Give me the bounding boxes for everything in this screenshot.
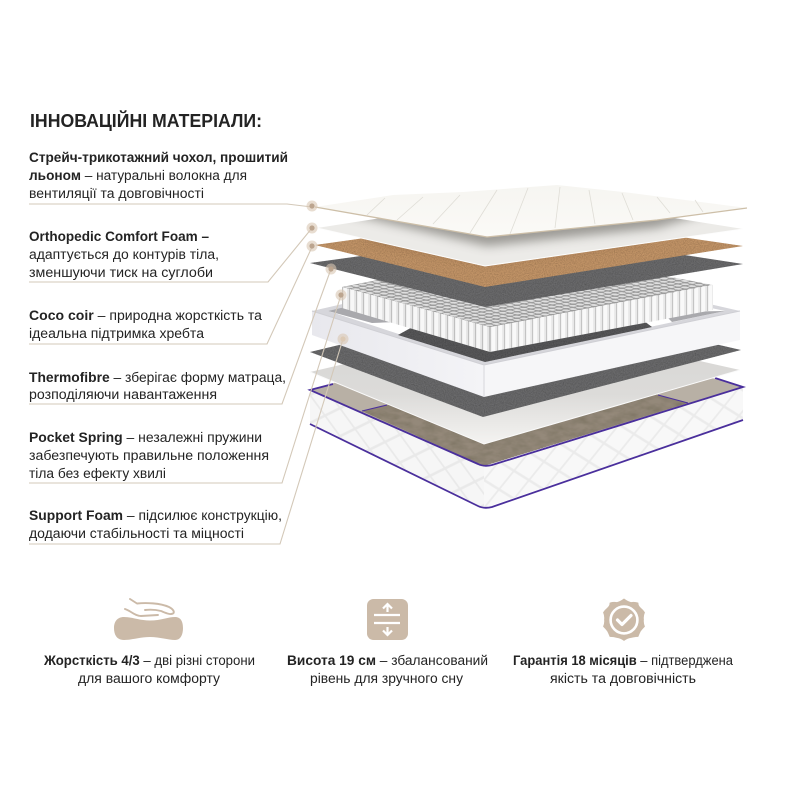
- feature text: height: рівень для зручного сну: [310, 671, 463, 686]
- comfort foam layer: [318, 218, 741, 266]
- title: ІННОВАЦІЙНІ МАТЕРІАЛИ:: [30, 110, 262, 131]
- lower grey felt layer: [310, 300, 741, 417]
- text block: orthopedic comfort foam: адаптується до контурів тіла,: [29, 247, 219, 262]
- text block: coco coir: Coco coir – природна жорсткість та: [29, 308, 263, 323]
- text block: thermofibre: розподіляючи навантаження: [29, 387, 217, 402]
- icon: warranty seal: [604, 599, 644, 640]
- text block: thermofibre: Thermofibre – зберігає форму матраца,: [29, 370, 286, 385]
- text block: thermofibre: [29, 370, 286, 402]
- feature text: firmness: Жорсткість 4/3 – дві різні сторони: [43, 653, 255, 668]
- text block: support foam: додаючи стабільності та міцності: [29, 526, 244, 541]
- feature text: firmness: [43, 653, 255, 686]
- feature text: warranty: Гарантія 18 місяців – підтверджена: [513, 653, 733, 668]
- callout markers: [306, 200, 348, 344]
- text block: stretch cover: Стрейч-трикотажний чохол, прошитий: [29, 150, 288, 165]
- icon: hand pressing pillow: [114, 599, 183, 640]
- text block: pocket spring: [29, 430, 269, 481]
- text block: stretch cover: льоном – натуральні волокна для: [29, 168, 247, 183]
- text block: support foam: Support Foam – підсилює конструкцію,: [29, 508, 282, 523]
- foam frame: [312, 262, 740, 397]
- icon: mattress height: [367, 599, 408, 640]
- upper grey felt layer: [310, 232, 743, 307]
- text block: orthopedic comfort foam: Orthopedic Comfort Foam –: [29, 229, 209, 244]
- pocket springs: [342, 250, 713, 352]
- feature text: warranty: [513, 653, 733, 686]
- exploded mattress illustration: [310, 185, 747, 508]
- coconut coir layer: [316, 238, 743, 287]
- base mattress: [310, 325, 743, 508]
- feature text: firmness: для вашого комфорту: [78, 671, 220, 686]
- text block: orthopedic comfort foam: зменшуючи тиск на суглоби: [29, 265, 213, 280]
- text block: stretch cover: вентиляції та довговічності: [29, 186, 204, 201]
- text block: pocket spring: забезпечують правильне положення: [29, 448, 269, 463]
- feature text: warranty: якість та довговічність: [550, 671, 696, 686]
- feature text: height: Висота 19 см – збалансований: [287, 653, 488, 668]
- text block: coco coir: ідеальна підтримка хребта: [29, 326, 204, 341]
- text block: orthopedic comfort foam: [29, 229, 219, 280]
- quilted linen cover: [315, 185, 747, 237]
- text block: coco coir: [29, 308, 263, 341]
- text block: pocket spring: тіла без ефекту хвилі: [29, 466, 166, 481]
- text block: pocket spring: Pocket Spring – незалежні пружини: [29, 430, 262, 445]
- lower foam layer: [310, 322, 740, 444]
- callout leader lines: [29, 204, 343, 544]
- text block: stretch cover: [29, 150, 288, 201]
- text block: support foam: [29, 508, 282, 541]
- feature text: height: [287, 653, 488, 686]
